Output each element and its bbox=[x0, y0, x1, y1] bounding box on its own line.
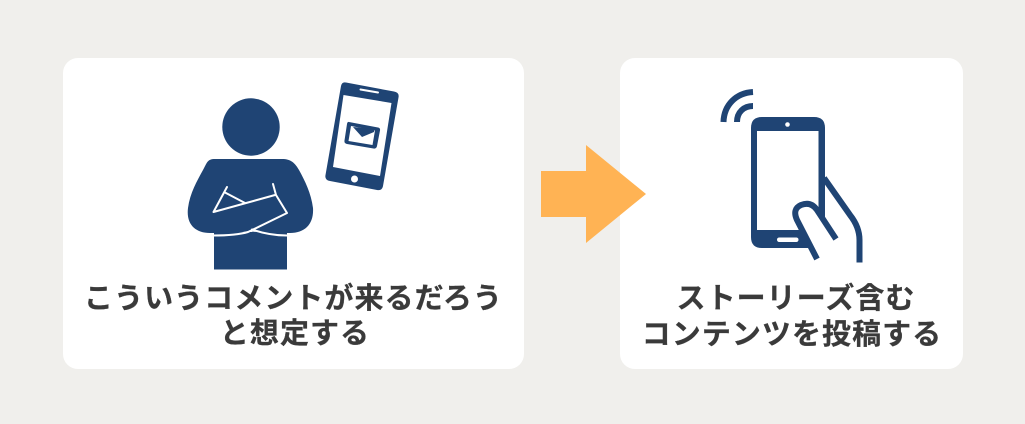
icon: signal waves bbox=[724, 92, 753, 122]
icon: hand holding smartphone bbox=[751, 117, 860, 262]
heading: left caption bbox=[84, 281, 503, 350]
panel background right bbox=[620, 58, 963, 369]
heading: right caption bbox=[642, 281, 942, 351]
heading: right caption: ストーリーズ含む bbox=[677, 281, 915, 315]
icon: person with crossed arms bbox=[188, 98, 313, 270]
icon: smartphone with mail bbox=[325, 82, 399, 190]
heading: right caption: コンテンツを投稿する bbox=[642, 318, 942, 351]
heading: left caption: と想定する bbox=[220, 317, 370, 350]
panel background left bbox=[63, 58, 524, 369]
heading: left caption: こういうコメントが来るだろう bbox=[84, 281, 503, 315]
arrow bbox=[541, 145, 646, 243]
panel: expected comments bbox=[63, 58, 524, 369]
panel: post content bbox=[620, 58, 963, 369]
